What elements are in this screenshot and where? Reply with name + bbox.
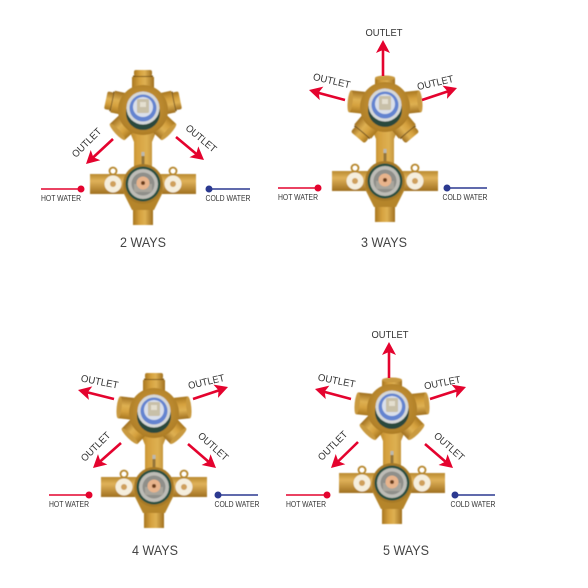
hot water line xyxy=(49,492,92,498)
arrow: top outlet xyxy=(376,40,390,76)
arrow: lower left outlet xyxy=(88,443,121,473)
label: outlet upper left: OUTLET xyxy=(80,374,119,392)
cold water line xyxy=(452,492,495,498)
arrow: lower right outlet xyxy=(176,137,208,165)
panel: 3 ways xyxy=(278,28,488,250)
caption: 3 ways: 3 WAYS xyxy=(361,234,407,250)
valve: 5 ways xyxy=(339,378,445,524)
arrow: left outlet xyxy=(307,83,345,100)
arrow: lower right outlet xyxy=(425,444,457,473)
label: cold water: COLD WATER xyxy=(450,500,496,509)
panel: 2 ways xyxy=(41,70,251,250)
label: cold water: COLD WATER xyxy=(442,193,488,202)
clipping mask above top label xyxy=(360,320,420,331)
label: outlet lower right: OUTLET xyxy=(431,431,466,464)
valve: 3 ways xyxy=(332,76,438,222)
label: outlet left: OUTLET xyxy=(70,126,104,160)
label: outlet lower left: OUTLET xyxy=(316,429,350,463)
caption: 4 ways: 4 WAYS xyxy=(132,542,178,558)
arrow: upper right outlet xyxy=(193,380,230,399)
arrow: upper left outlet xyxy=(313,382,351,399)
label: hot water: HOT WATER xyxy=(49,500,89,509)
hot water line xyxy=(41,186,84,192)
label: cold water: COLD WATER xyxy=(214,500,260,509)
arrow: right outlet xyxy=(422,81,459,100)
cold water line xyxy=(444,184,487,192)
caption: 2 ways: 2 WAYS xyxy=(120,234,166,250)
label: hot water: HOT WATER xyxy=(286,500,326,509)
panel: 4 ways xyxy=(49,373,260,558)
label: outlet left: OUTLET xyxy=(312,72,351,91)
label: outlet upper right: OUTLET xyxy=(187,373,226,392)
label: outlet top: OUTLET xyxy=(366,28,402,39)
label: outlet top, clipped: OUTLET xyxy=(372,330,408,341)
label: outlet right: OUTLET xyxy=(416,74,455,93)
arrow: lower left outlet xyxy=(81,139,113,169)
label: outlet lower right: OUTLET xyxy=(195,431,230,464)
label: outlet upper right: OUTLET xyxy=(423,375,462,392)
label: outlet upper left: OUTLET xyxy=(317,373,356,391)
caption: 5 ways: 5 WAYS xyxy=(383,542,429,558)
valve: 2 ways xyxy=(90,70,196,225)
label: hot water: HOT WATER xyxy=(41,194,81,203)
arrow: upper right outlet xyxy=(430,380,468,399)
arrow: upper left outlet xyxy=(76,383,114,400)
label: cold water: COLD WATER xyxy=(206,194,251,203)
arrow: lower right outlet xyxy=(188,444,220,473)
valve: 4 ways xyxy=(101,373,207,528)
label: outlet lower left: OUTLET xyxy=(79,430,113,464)
cold water line xyxy=(206,186,250,192)
hot water line xyxy=(286,492,330,498)
arrow: top outlet xyxy=(382,342,396,378)
label: hot water: HOT WATER xyxy=(278,193,318,202)
hot water line xyxy=(278,184,322,192)
arrow: lower left outlet xyxy=(326,442,358,473)
panel: 5 ways xyxy=(286,320,496,558)
cold water line xyxy=(214,492,258,498)
label: outlet right: OUTLET xyxy=(183,123,218,155)
